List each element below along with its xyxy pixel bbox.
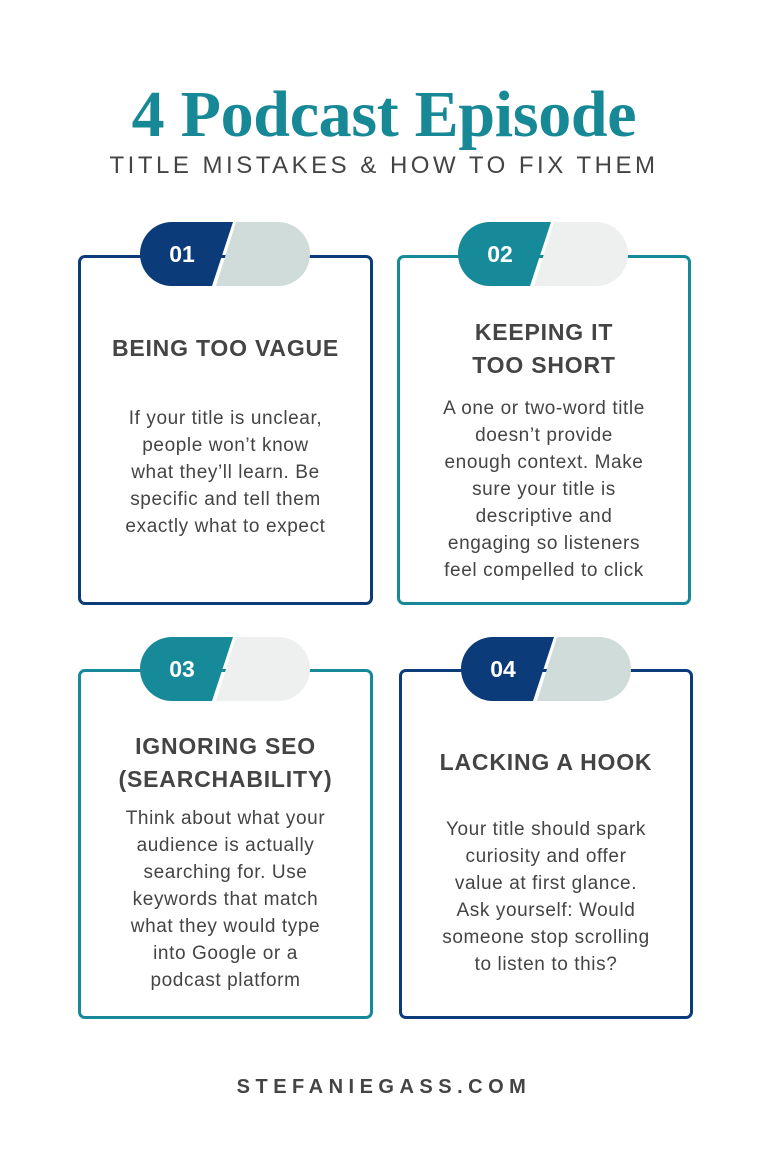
body 1: specific and tell them — [130, 489, 321, 510]
heading 2 — [472, 319, 616, 378]
heading 3 — [119, 733, 332, 792]
body 3: Think about what your — [126, 808, 325, 829]
body 1: If your title is unclear, — [129, 408, 322, 429]
body 2 — [443, 398, 645, 581]
badge 03 — [140, 637, 310, 701]
body 4: Your title should spark — [446, 819, 646, 840]
badge 02 — [458, 222, 628, 286]
body 2: descriptive and — [476, 506, 612, 527]
badge 04: 04 — [490, 656, 516, 682]
title: 4 Podcast Episode — [132, 78, 636, 151]
footer: STEFANIEGASS.COM — [237, 1076, 531, 1098]
badge 01: 01 — [169, 241, 195, 267]
body 4: to listen to this? — [475, 954, 617, 975]
body 2: A one or two-word title — [443, 398, 645, 419]
body 2: engaging so listeners — [448, 533, 640, 554]
body 3: podcast platform — [150, 970, 301, 991]
body 4: Ask yourself: Would — [457, 900, 635, 921]
body 3: into Google or a — [153, 943, 298, 964]
badge 03: 03 — [169, 656, 195, 682]
body 4 — [442, 819, 650, 975]
panel: card 4 — [399, 669, 693, 1019]
heading 3: (SEARCHABILITY) — [119, 766, 332, 792]
body 1: people won’t know — [142, 435, 309, 456]
heading 2: TOO SHORT — [472, 352, 616, 378]
body 4: curiosity and offer — [465, 846, 626, 867]
heading 1: BEING TOO VAGUE — [112, 335, 339, 361]
body 4: value at first glance. — [455, 873, 637, 894]
body 3: keywords that match — [133, 889, 318, 910]
badge 02: 02 — [487, 241, 513, 267]
panel: card 2 — [397, 255, 691, 605]
body 3 — [126, 808, 325, 991]
body 3: audience is actually — [137, 835, 314, 856]
body 2: sure your title is — [472, 479, 616, 500]
body 1 — [125, 408, 326, 537]
subtitle: TITLE MISTAKES & HOW TO FIX THEM — [110, 152, 658, 179]
body 1: exactly what to expect — [125, 516, 326, 537]
body 3: searching for. Use — [144, 862, 307, 883]
body 2: enough context. Make — [445, 452, 643, 473]
body 3: what they would type — [131, 916, 320, 937]
heading 2: KEEPING IT — [475, 319, 613, 345]
heading 3: IGNORING SEO — [135, 733, 316, 759]
body 1: what they’ll learn. Be — [131, 462, 320, 483]
badge 01 — [140, 222, 310, 286]
body 2: doesn’t provide — [475, 425, 613, 446]
body 4: someone stop scrolling — [442, 927, 650, 948]
heading 4: LACKING A HOOK — [440, 749, 652, 775]
badge 04 — [461, 637, 631, 701]
panel: card 3 — [78, 669, 373, 1019]
body 2: feel compelled to click — [444, 560, 644, 581]
panel: card 1 — [78, 255, 373, 605]
